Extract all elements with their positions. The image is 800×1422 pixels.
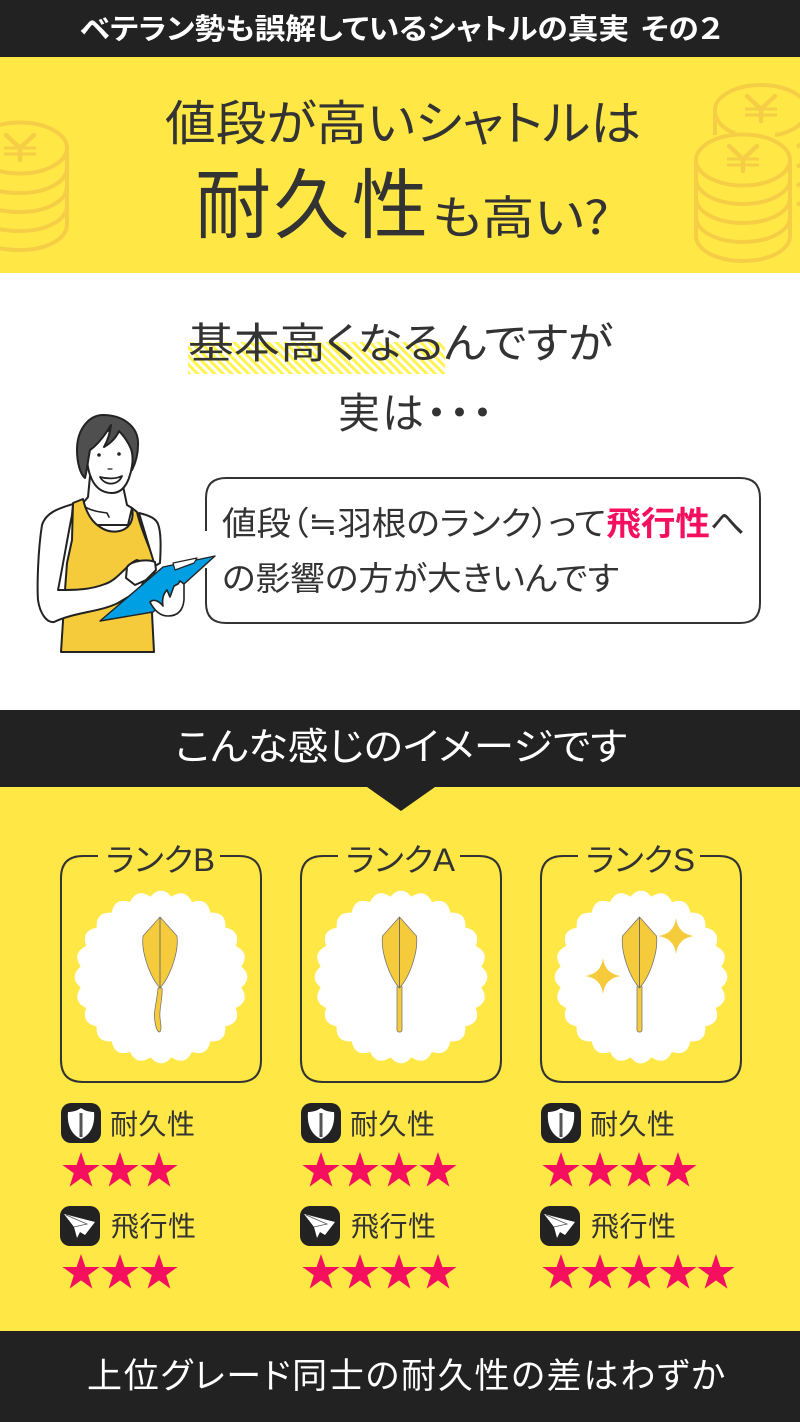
durability row <box>541 1103 696 1187</box>
head <box>87 431 133 493</box>
icon: shuttle feather <box>382 917 417 1032</box>
neck <box>83 476 132 525</box>
illustration: woman with clipboard <box>38 415 215 652</box>
footer conclusion: 上位グレード同士の耐久性の差はわずか <box>87 1357 725 1396</box>
clipboard <box>100 556 215 621</box>
bubble text line 2: の影響の方が大きいんです <box>222 560 619 597</box>
tank top <box>61 499 155 652</box>
section band <box>0 710 800 787</box>
intro text block <box>188 320 613 437</box>
flight row: 飛行性 <box>351 1211 436 1242</box>
speech bubble <box>206 478 760 623</box>
writing hand <box>126 560 156 585</box>
hero title line 2: 耐久性 <box>195 164 428 249</box>
header title: その２ <box>641 6 722 48</box>
flight row <box>60 1206 196 1289</box>
highlight stripe <box>188 342 445 374</box>
badge background <box>75 891 247 1063</box>
hero title line 2: も高い? <box>432 182 609 248</box>
badge background <box>315 891 487 1063</box>
hero title line 1: 値段が高いシャトルは <box>165 98 641 151</box>
durability row: 耐久性 <box>350 1109 435 1140</box>
durability row <box>301 1103 456 1187</box>
hair <box>77 415 138 478</box>
band pointer <box>367 787 435 811</box>
flight row: 飛行性 <box>591 1211 676 1242</box>
right arm <box>139 513 161 566</box>
card: rank A <box>300 842 501 1289</box>
section title: こんな感じのイメージです <box>175 727 627 769</box>
flight row <box>540 1206 734 1289</box>
icon: shuttle feather bent <box>143 917 177 1032</box>
comparison panel <box>0 787 800 1331</box>
card: rank B <box>60 842 261 1289</box>
intro line 2: 実は・・・ <box>338 390 493 437</box>
icon: coins right <box>696 85 800 261</box>
clipboard clip <box>173 558 197 570</box>
durability row: 耐久性 <box>590 1109 675 1140</box>
badge background <box>555 891 727 1063</box>
left arm <box>38 504 150 622</box>
flight row: 飛行性 <box>111 1211 196 1242</box>
header title: ベテラン勢も誤解しているシャトルの真実 <box>80 13 629 46</box>
rank label: ランクS <box>586 842 695 878</box>
icon: shuttle feather with sparkles <box>585 917 694 1032</box>
hero panel <box>0 57 800 273</box>
nose <box>108 468 112 470</box>
top header bar <box>0 0 800 57</box>
footer band <box>0 1331 800 1422</box>
eyes <box>97 452 121 457</box>
holding hand <box>150 581 184 616</box>
durability row: 耐久性 <box>110 1109 195 1140</box>
flight row <box>300 1206 456 1289</box>
hero title line 2 <box>195 164 609 249</box>
smile <box>100 476 122 484</box>
rank label: ランクA <box>346 842 456 878</box>
intro line 1: 基本高くなるんですが <box>188 320 613 367</box>
rank label: ランクB <box>106 842 215 878</box>
bubble text line 1: 値段（≒羽根のランク）って 飛行性へ <box>222 505 745 542</box>
neck collar line <box>85 507 109 517</box>
card: rank S <box>540 842 741 1289</box>
icon: coins left <box>0 122 67 250</box>
durability row <box>61 1103 195 1187</box>
